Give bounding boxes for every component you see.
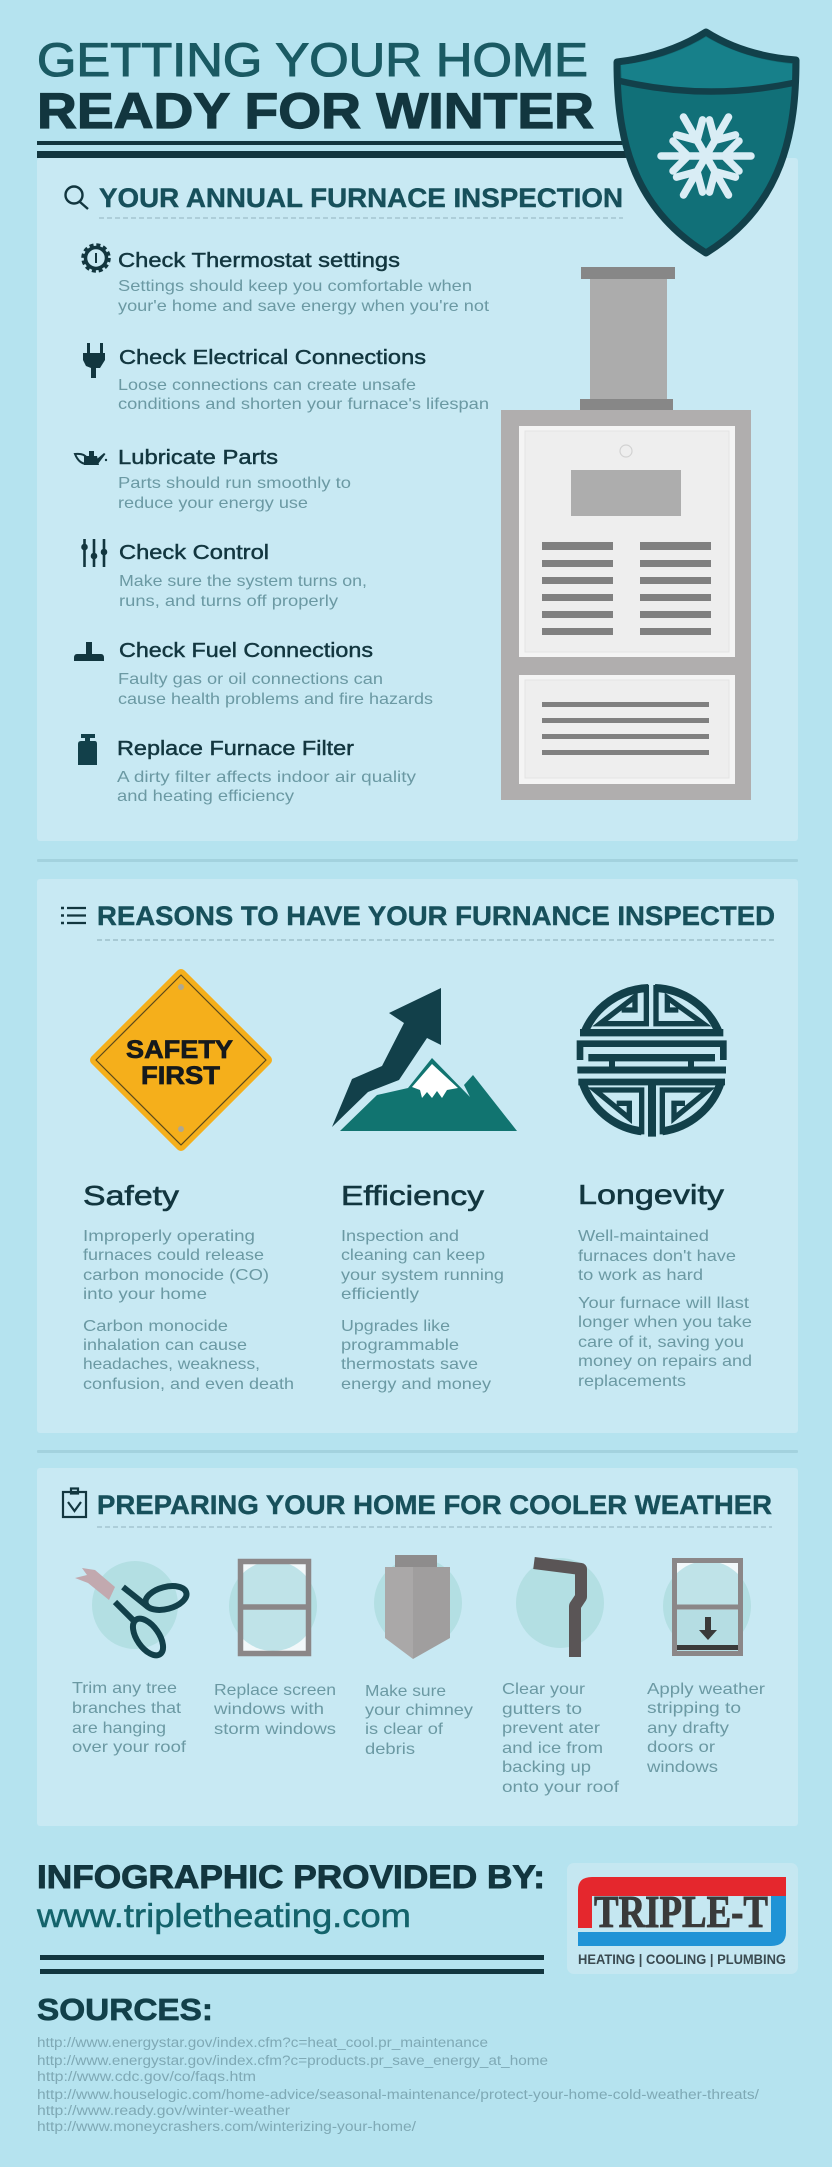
icon: thermostat gear xyxy=(83,245,109,271)
column: longevity: Well-maintained xyxy=(578,1228,709,1245)
step: trim branches: are hanging xyxy=(72,1720,166,1737)
furnace illustration xyxy=(501,267,751,800)
item: check electrical connections: Loose connections can create unsafe xyxy=(118,377,416,394)
panel: annual furnace inspection background xyxy=(37,158,798,841)
item: replace furnace filter: and heating efficiency xyxy=(117,788,294,805)
step: gutters: and ice from xyxy=(502,1740,603,1757)
step: chimney: is clear of xyxy=(365,1721,444,1738)
column: efficiency: Inspection and xyxy=(341,1228,459,1245)
column: longevity: Longevity xyxy=(578,1179,724,1210)
icon: sliders xyxy=(82,539,106,567)
step: weather stripping xyxy=(646,1558,766,1776)
item: check fuel connections xyxy=(74,639,433,708)
column: safety: Safety xyxy=(83,1180,179,1211)
logo: Triple-T: HEATING | COOLING | PLUMBING xyxy=(578,1952,786,1967)
column: efficiency: efficiently xyxy=(341,1286,419,1303)
item: check electrical connections: Check Electrical Connections xyxy=(119,346,426,369)
icon: window xyxy=(229,1559,317,1656)
heading: your annual furnace inspection: YOUR ANNUAL FURNACE INSPECTION xyxy=(99,183,623,213)
step: storm windows: Replace screen xyxy=(214,1682,336,1699)
step: storm windows: windows with xyxy=(213,1701,324,1718)
item: check fuel connections: Check Fuel Connections xyxy=(119,639,373,662)
step: gutters: prevent ater xyxy=(502,1720,601,1737)
item: lubricate parts: Lubricate Parts xyxy=(118,446,278,469)
column: longevity: care of it, saving you xyxy=(578,1334,744,1351)
heading: preparing your home for cooler weather: PREPARING YOUR HOME FOR COOLER WEATHER xyxy=(97,1490,772,1520)
title: GETTING YOUR HOME xyxy=(37,34,588,87)
item: check control: Check Control xyxy=(119,541,269,564)
item: check control: runs, and turns off properly xyxy=(119,593,338,610)
sources: SOURCES: xyxy=(37,1992,213,2027)
column: efficiency: programmable xyxy=(341,1337,459,1354)
item: check electrical connections xyxy=(83,343,489,413)
item: check thermostat: your'e home and save energy when you're not xyxy=(118,298,490,315)
step: weather stripping: windows xyxy=(646,1759,718,1776)
title: READY FOR WINTER xyxy=(37,83,594,139)
column: efficiency: your system running xyxy=(341,1267,504,1284)
column: longevity xyxy=(578,1179,752,1390)
step: gutters xyxy=(502,1558,620,1796)
column: efficiency: energy and money xyxy=(341,1376,491,1393)
icon: chimney xyxy=(374,1555,462,1659)
sources xyxy=(37,1992,759,2134)
sources: http://www.houselogic.com/home-advice/seasonal-maintenance/protect-your-home-cold-weather-threats/ xyxy=(37,2087,759,2102)
step: storm windows xyxy=(213,1559,336,1738)
column: longevity: Your furnace will llast xyxy=(578,1295,750,1312)
logo: Triple-T: TRIPLE-T xyxy=(594,1886,768,1937)
item: check control xyxy=(82,539,367,610)
icon: shield with snowflake xyxy=(617,32,796,253)
column: longevity: replacements xyxy=(578,1373,686,1390)
panel: preparing your home background xyxy=(37,1468,798,1826)
column: efficiency: thermostats save xyxy=(341,1356,478,1373)
step: gutters: onto your roof xyxy=(502,1779,620,1796)
step: chimney: your chimney xyxy=(365,1702,473,1719)
item: check control: Make sure the system turns on, xyxy=(119,573,367,590)
icon: longevity symbol xyxy=(577,985,726,1137)
column: longevity: furnaces don't have xyxy=(578,1248,736,1265)
column: safety: furnaces could release xyxy=(83,1247,264,1264)
panel: reasons background xyxy=(37,879,798,1433)
step: trim branches: Trim any tree xyxy=(72,1680,177,1697)
item: lubricate parts xyxy=(75,446,351,512)
icon: oil can xyxy=(75,451,107,465)
item: check thermostat: Settings should keep you comfortable when xyxy=(118,278,472,295)
sources: http://www.energystar.gov/index.cfm?c=products.pr_save_energy_at_home xyxy=(37,2053,548,2068)
icon: magnifier xyxy=(66,186,88,209)
step: gutters: gutters to xyxy=(502,1701,582,1718)
step: weather stripping: doors or xyxy=(647,1739,716,1756)
item: replace furnace filter: Replace Furnace Filter xyxy=(117,737,354,760)
heading: reasons to have your furnace inspected: REASONS TO HAVE YOUR FURNANCE INSPECTED xyxy=(97,901,775,931)
item: check fuel connections: cause health problems and fire hazards xyxy=(118,691,433,708)
icon: safety first sign xyxy=(95,974,267,1146)
item: check thermostat xyxy=(83,245,490,315)
icon: arrow over mountain xyxy=(332,988,517,1131)
item: check electrical connections: conditions and shorten your furnace's lifespan xyxy=(118,396,489,413)
icon: plug xyxy=(83,343,105,378)
column: safety: inhalation can cause xyxy=(83,1337,247,1354)
item: check thermostat: Check Thermostat settings xyxy=(118,249,400,272)
step: weather stripping: any drafty xyxy=(647,1720,729,1737)
sources: http://www.energystar.gov/index.cfm?c=heat_cool.pr_maintenance xyxy=(37,2035,488,2050)
column: efficiency xyxy=(341,1180,504,1393)
item: replace furnace filter xyxy=(78,734,416,805)
column: safety: Improperly operating xyxy=(83,1228,255,1245)
column: safety: headaches, weakness, xyxy=(83,1356,260,1373)
column: safety xyxy=(83,1180,294,1393)
item: lubricate parts: Parts should run smoothly to xyxy=(118,475,351,492)
provider credit: www.tripletheating.com xyxy=(36,1897,411,1934)
provider credit xyxy=(36,1859,545,1934)
provider credit: INFOGRAPHIC PROVIDED BY: xyxy=(37,1859,545,1895)
item: lubricate parts: reduce your energy use xyxy=(118,495,308,512)
icon: filter xyxy=(78,734,97,765)
icon: fuel pipe xyxy=(74,642,104,661)
logo: Triple-T xyxy=(567,1863,798,1974)
column: safety: carbon monocide (CO) xyxy=(83,1267,269,1284)
icon: window with weather strip xyxy=(663,1558,751,1656)
title xyxy=(37,34,594,139)
column: longevity: money on repairs and xyxy=(578,1353,752,1370)
sources: http://www.cdc.gov/co/faqs.htm xyxy=(37,2069,256,2084)
step: trim branches: over your roof xyxy=(72,1739,187,1756)
icon: safety first sign: FIRST xyxy=(141,1062,220,1090)
column: efficiency: cleaning can keep xyxy=(341,1247,485,1264)
step: trim branches xyxy=(72,1561,189,1756)
icon: safety first sign: SAFETY xyxy=(126,1036,233,1064)
icon: clipboard xyxy=(63,1488,86,1517)
icon: gutter downspout xyxy=(516,1558,604,1657)
step: gutters: Clear your xyxy=(502,1681,586,1698)
column: efficiency: Upgrades like xyxy=(341,1318,450,1335)
step: trim branches: branches that xyxy=(72,1700,182,1717)
sources: http://www.ready.gov/winter-weather xyxy=(37,2103,291,2118)
item: check fuel connections: Faulty gas or oil connections can xyxy=(118,671,383,688)
sources: http://www.moneycrashers.com/winterizing-your-home/ xyxy=(37,2119,416,2134)
step: storm windows: storm windows xyxy=(214,1721,336,1738)
title double rule xyxy=(37,141,627,158)
icon: pruning shears xyxy=(75,1561,189,1661)
column: safety: Carbon monocide xyxy=(83,1318,228,1335)
column: safety: confusion, and even death xyxy=(83,1376,294,1393)
step: weather stripping: Apply weather xyxy=(647,1681,766,1698)
column: longevity: to work as hard xyxy=(578,1267,703,1284)
column: safety: into your home xyxy=(83,1286,207,1303)
column: efficiency: Efficiency xyxy=(341,1180,484,1211)
footer double rule xyxy=(40,1955,544,1974)
column: longevity: longer when you take xyxy=(578,1314,752,1331)
step: chimney: Make sure xyxy=(365,1683,446,1700)
step: weather stripping: stripping to xyxy=(647,1700,741,1717)
step: chimney: debris xyxy=(365,1741,415,1758)
step: chimney xyxy=(365,1555,473,1758)
icon: list xyxy=(61,908,86,923)
step: gutters: backing up xyxy=(502,1759,591,1776)
item: replace furnace filter: A dirty filter affects indoor air quality xyxy=(117,769,416,786)
